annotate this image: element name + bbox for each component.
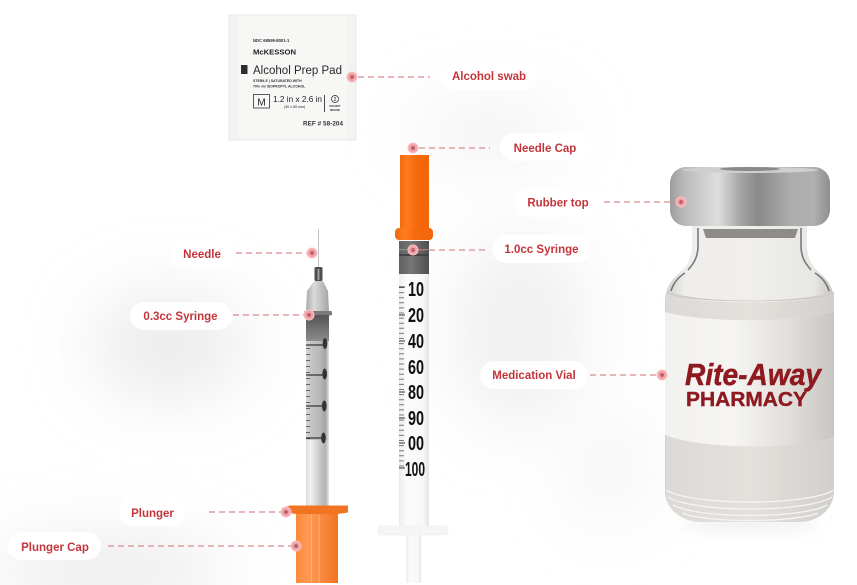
callout: plunger cap: Plunger Cap	[21, 542, 89, 554]
pharmacy name: PHARMACY	[686, 389, 808, 411]
scale ticks	[306, 348, 310, 442]
scale numbers: 00	[408, 433, 424, 455]
scale marks	[306, 338, 327, 444]
do not reuse symbol: REUSE	[330, 108, 340, 112]
brand name: McKESSON	[253, 48, 296, 56]
do not reuse symbol: DO NOT	[330, 104, 341, 108]
callout: 0.3cc syringe: 0.3cc Syringe	[143, 311, 218, 323]
0.3cc syringe	[282, 229, 348, 583]
callout: 1.0cc syringe	[408, 235, 591, 263]
scale numbers: 40	[408, 331, 424, 353]
glass neck highlights	[671, 228, 829, 291]
neck stopper	[703, 229, 798, 238]
scale numbers: 90	[408, 408, 424, 430]
callout: 0.3cc syringe	[130, 302, 314, 330]
do not reuse symbol: 2	[334, 97, 337, 103]
background soft shadows	[0, 102, 650, 585]
size box: M	[257, 98, 266, 108]
scale numbers: 10	[408, 279, 424, 301]
callout: medication vial	[480, 361, 667, 389]
alcohol swab packet	[229, 15, 356, 140]
dimensions: 1.2 in x 2.6 in	[273, 94, 322, 104]
1.0cc syringe	[378, 155, 448, 583]
callout: alcohol swab: Alcohol swab	[452, 71, 526, 83]
callout: plunger	[119, 498, 291, 526]
collar	[306, 281, 329, 311]
vial shadow	[680, 520, 820, 528]
do not reuse symbol	[324, 95, 341, 112]
metal cap	[670, 167, 830, 226]
brand name: Rite-Away	[685, 357, 823, 392]
callout: needle cap: Needle Cap	[514, 143, 576, 155]
scale numbers: 60	[408, 357, 424, 379]
scale numbers: 100	[405, 459, 425, 481]
barrel	[399, 274, 429, 527]
callout: rubber top	[515, 189, 686, 217]
product marker	[241, 65, 248, 74]
callout: rubber top: Rubber top	[527, 198, 589, 210]
plunger flange	[282, 506, 348, 514]
needle hub	[314, 267, 322, 281]
glass body	[665, 224, 834, 522]
scale numbers	[405, 279, 425, 481]
callout: plunger cap	[8, 532, 301, 560]
needle cap	[395, 155, 433, 240]
needle	[318, 229, 319, 267]
collar flange	[304, 311, 332, 316]
callout: alcohol swab	[347, 62, 538, 90]
callout: medication vial: Medication Vial	[492, 370, 576, 382]
barrel	[306, 315, 329, 506]
label	[665, 312, 834, 447]
medication vial	[665, 167, 834, 528]
liquid	[666, 292, 834, 522]
reference number: REF # 58-204	[303, 120, 343, 128]
product name: Alcohol Prep Pad	[253, 65, 342, 77]
plunger rod	[406, 535, 421, 583]
liquid surface	[667, 292, 833, 301]
plunger cap body	[296, 514, 338, 583]
callout: plunger: Plunger	[131, 508, 174, 520]
callout: needle	[170, 240, 317, 268]
callout: needle: Needle	[183, 249, 221, 261]
gray hub	[399, 241, 429, 274]
callout: needle cap	[408, 133, 590, 161]
product details	[253, 79, 306, 88]
scale ticks	[399, 287, 405, 470]
NDC code: NDC 68599-8001-1	[253, 38, 290, 43]
bottom glass rings	[666, 490, 834, 520]
dimensions	[273, 94, 322, 109]
product details: 70% v/v ISOPROPYL ALCOHOL	[253, 84, 306, 88]
scale numbers: 20	[408, 305, 424, 327]
product details: STERILE | SATURATED WITH	[253, 79, 302, 83]
finger flange	[378, 526, 448, 535]
callout: 1.0cc syringe: 1.0cc Syringe	[504, 244, 579, 256]
dimensions: (30 x 65 mm)	[284, 105, 305, 109]
scale numbers: 80	[408, 382, 424, 404]
